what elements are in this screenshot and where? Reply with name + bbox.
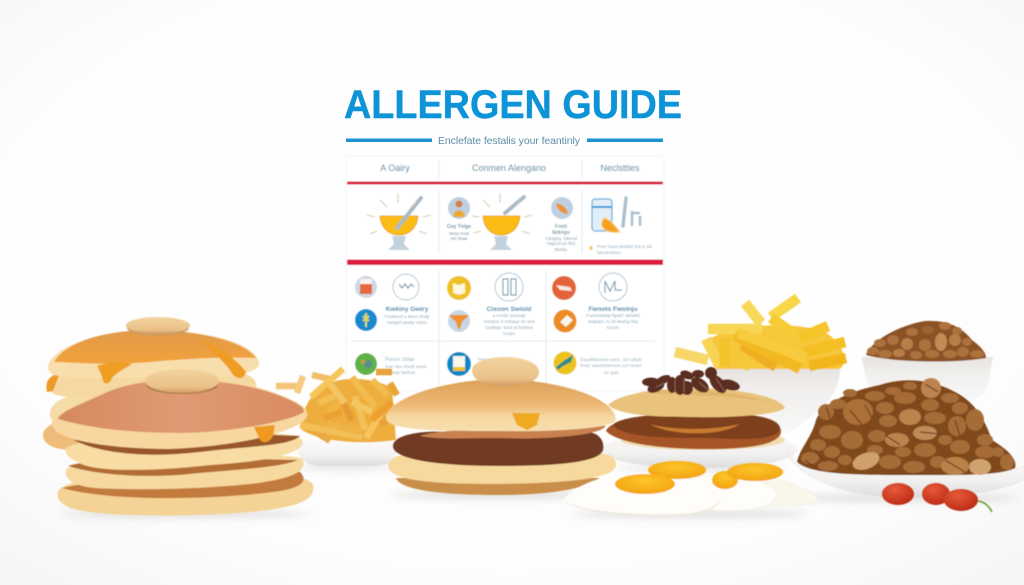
labels: row three: Ptsy — [478, 357, 488, 363]
label: egg — [447, 224, 471, 241]
label: egg: vto bkae — [450, 236, 468, 241]
label: fruit: Hspcrd pn fbN — [547, 241, 575, 246]
food: back pancake stack — [43, 317, 259, 450]
food: small nut bowl — [862, 321, 993, 402]
nut pile — [797, 380, 1015, 475]
column headers — [380, 163, 640, 173]
column dividers — [350, 160, 655, 385]
labels: row one: Gadhap: fand at fnbthse — [485, 325, 534, 330]
fries — [708, 325, 844, 369]
labels: row one: Gredo — [607, 325, 620, 330]
food: tomatoes — [882, 483, 992, 512]
labels: row one: a ncvds cpsorap — [493, 313, 526, 318]
note: fatsstnstass — [597, 250, 622, 255]
yolks — [712, 471, 738, 489]
bowl — [716, 368, 840, 432]
note: Pnor fopot andalis bot a sal — [597, 244, 652, 249]
panel: allergen chart — [346, 156, 664, 391]
icons: row one — [355, 273, 627, 301]
label: fruit: Bnsky — [555, 247, 568, 252]
labels: row three: Expaftitaorsw aour, ud cubps — [580, 357, 642, 363]
labels: row one: Fuvkwod a dwun hndp — [384, 314, 430, 319]
labels: row three: fnop: tawstrtwnorw our toravt — [580, 363, 642, 369]
plate — [787, 453, 1024, 498]
labels: row one: mutps — [503, 331, 516, 336]
labels: row three: on gsd — [604, 370, 619, 376]
label: fruit: Csnpjny, bikeod — [545, 236, 577, 241]
food: nut plate — [787, 378, 1024, 498]
lower red rule — [347, 260, 663, 265]
labels: row one: swrgert pnsky Volus — [387, 320, 428, 325]
column headers: A Oairy — [380, 163, 410, 173]
icons: row three — [355, 352, 576, 376]
labels: row one — [384, 306, 640, 336]
label: egg: Coy Tnlge — [447, 224, 471, 230]
food: bean pancake on plate — [600, 367, 798, 468]
labels: row one: Fussnswtwp ftpwt? detwltd — [586, 313, 640, 318]
beans — [642, 367, 741, 396]
labels: row three: Ivat cka Jbsdr pnsd — [385, 364, 427, 370]
icon: glass with orange — [592, 198, 640, 232]
soft contact shadows — [60, 464, 1020, 518]
top red rule — [347, 182, 663, 184]
labels: row one: Cixoon Swiold — [487, 306, 531, 313]
labels: row one: Kwkiny Gwiry — [386, 306, 429, 313]
subtitle with rules — [346, 135, 663, 147]
labels: row three: Pwsor cihlal — [385, 357, 414, 363]
icon: fish — [551, 197, 573, 219]
label: fruit — [545, 224, 577, 252]
icon: person — [448, 197, 470, 219]
plate — [600, 432, 798, 468]
note — [589, 244, 652, 255]
food: centre sandwich — [386, 357, 616, 495]
label: fruit: Fnolt — [555, 224, 567, 230]
label: fruit: fatkngs — [552, 230, 570, 236]
subtitle with rules: Enclefate festalis your feantinly — [438, 135, 581, 147]
bowl icon 2 — [472, 193, 532, 250]
column headers: Conmen Alengano — [472, 163, 546, 173]
title: ALLERGEN GUIDE — [344, 83, 682, 127]
icons: row two — [355, 309, 576, 332]
labels: row three: sswtap fwrbwt — [385, 370, 416, 376]
labels: row one: rtwpnpn: is hd twsing fwp — [588, 319, 639, 324]
food: fries bowl — [675, 298, 846, 432]
lid — [472, 357, 539, 386]
plate — [298, 441, 396, 466]
food: fries on plate left — [276, 369, 398, 466]
food: fried eggs — [563, 461, 818, 516]
label: egg: Mnyt resd — [449, 231, 469, 236]
labels: row one: Genpne 6 trsbaqn tsr sed — [484, 319, 535, 324]
column headers: Neclstties — [600, 163, 640, 173]
bowl icon 1 — [367, 193, 431, 250]
food: front pancake stack — [52, 369, 313, 515]
labels: row one: Fwnots Fwoinju — [588, 306, 638, 313]
lid — [145, 369, 219, 394]
lid — [126, 317, 190, 336]
labels: row three — [385, 357, 642, 376]
